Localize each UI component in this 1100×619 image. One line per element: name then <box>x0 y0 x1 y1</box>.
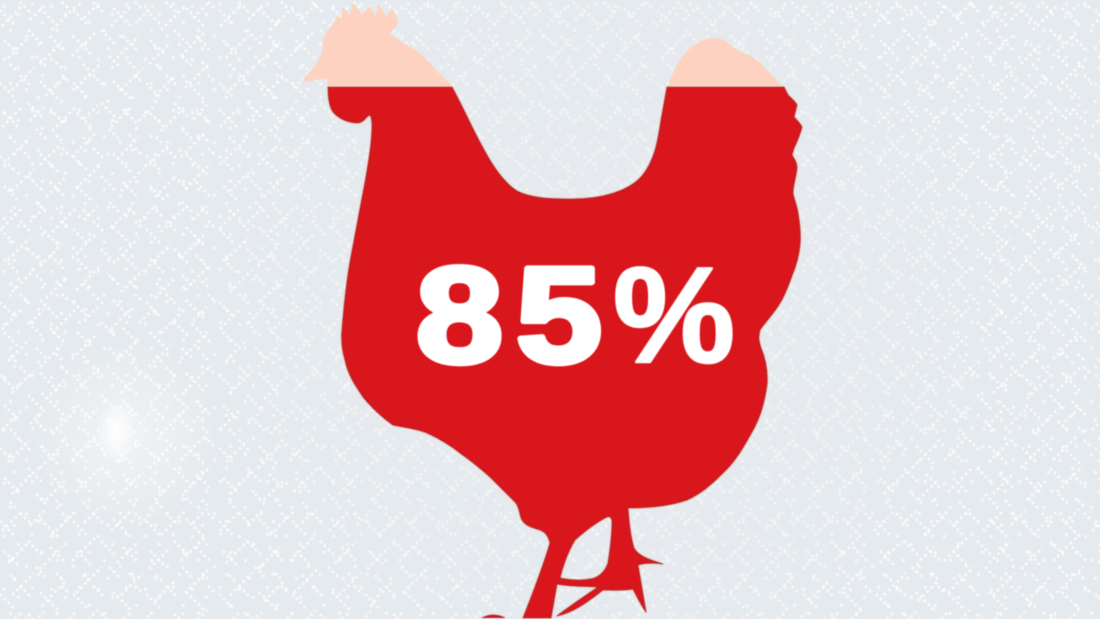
digit 8: 8 <box>416 239 503 391</box>
small toe at bottom edge <box>481 615 506 618</box>
pale halo around the body <box>328 87 802 618</box>
percentage label <box>416 239 735 391</box>
filled red body and legs <box>328 87 802 618</box>
unfilled tail top <box>668 38 784 88</box>
percent sign: % <box>613 239 735 391</box>
digit 5: 5 <box>516 239 602 391</box>
chicken silhouette: 85 percent filled <box>303 3 802 618</box>
red fill <box>328 87 802 618</box>
unfilled head: comb and beak <box>303 3 453 88</box>
